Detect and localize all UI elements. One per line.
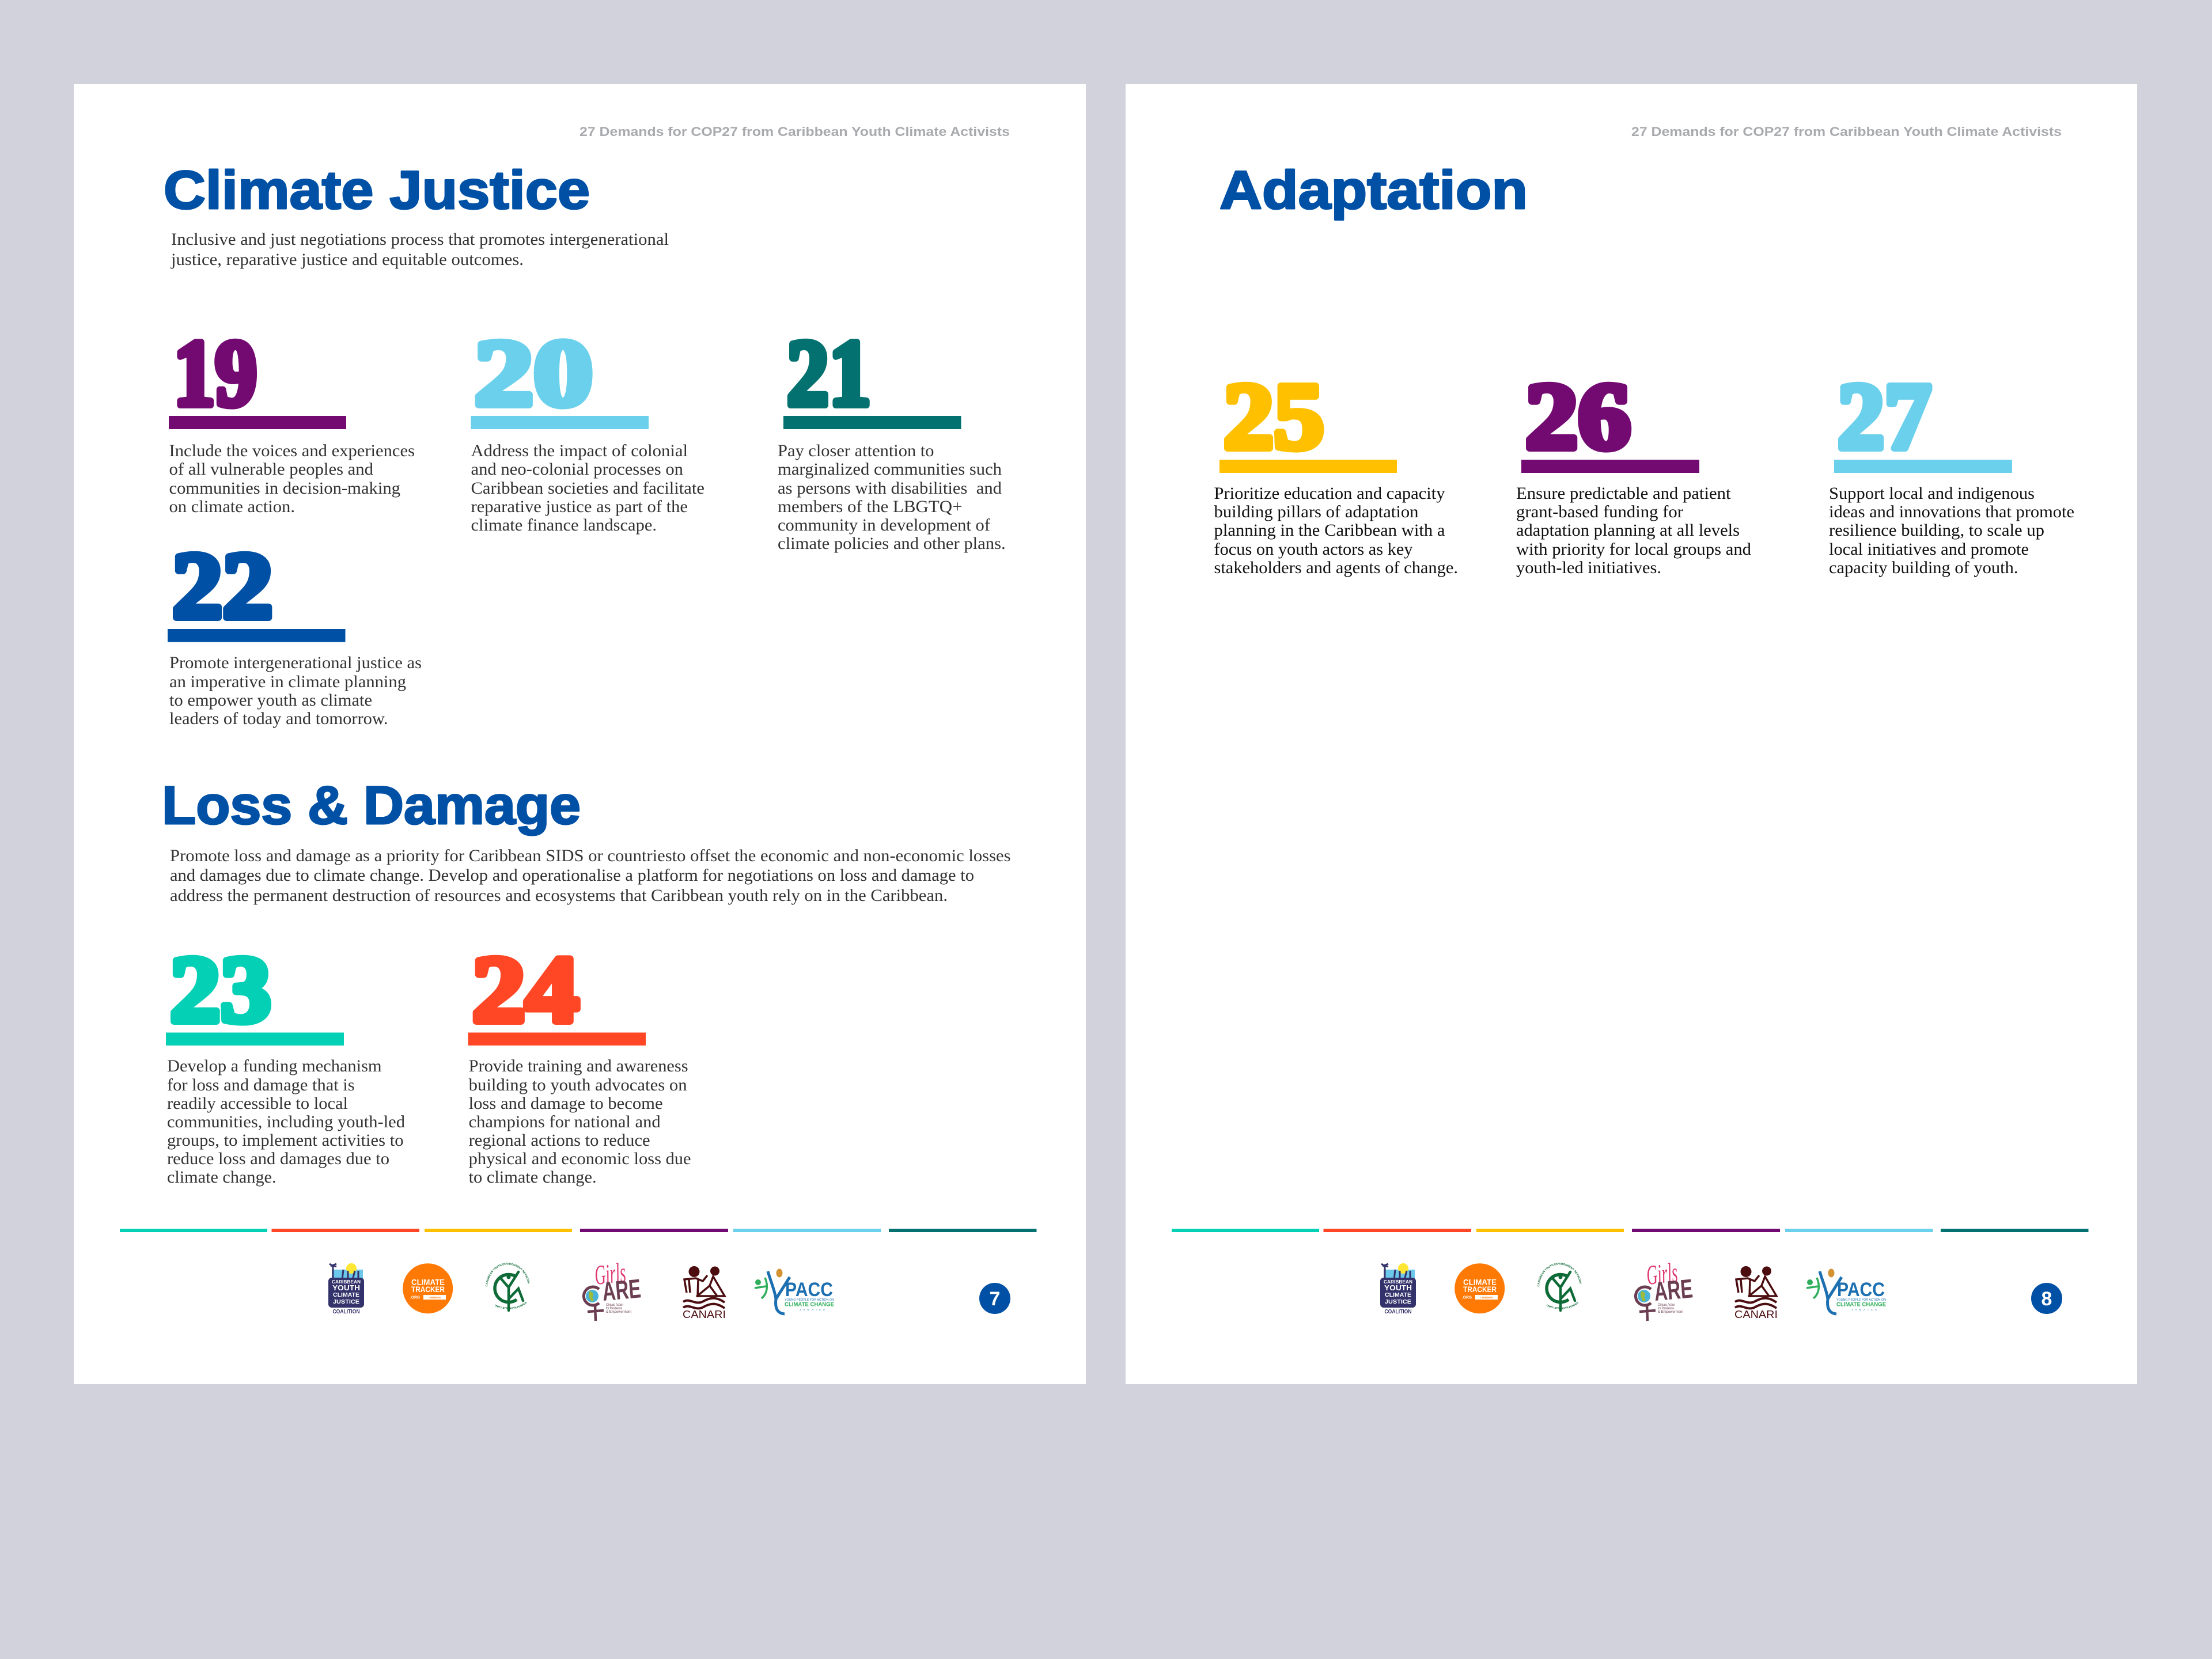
text: demand 19: of all vulnerable peoples and [169, 460, 373, 479]
text: demand 25: Prioritize education and capacity [1214, 484, 1445, 503]
running header: 27 Demands for COP27 from Caribbean Youth Climate Activists [1631, 124, 2062, 139]
logo: YPACC Jamaica: JAMAICA [800, 1308, 825, 1311]
demand 19: 19 [173, 320, 257, 426]
text: loss and damage intro: and damages due to climate change. Develop and operationalise a platform for negotiations on loss and damage to [170, 866, 974, 885]
text: demand 26: Ensure predictable and patient [1516, 484, 1731, 503]
text: demand 21: Pay closer attention to [778, 441, 934, 460]
logo: Climate Tracker: .ORG [410, 1296, 421, 1300]
demand 23: 23 [170, 937, 271, 1042]
demand 25: 25 [1224, 363, 1324, 469]
text: demand 24: regional actions to reduce [469, 1131, 650, 1150]
logo: Girls CARE [1635, 1257, 1694, 1321]
demand 27 [1829, 363, 2074, 577]
demand 24 [468, 937, 691, 1187]
text: demand 23 [167, 1056, 405, 1187]
text: demand 23: groups, to implement activities to [167, 1131, 403, 1150]
text: demand 25: stakeholders and agents of change. [1214, 558, 1458, 577]
text: demand 22: leaders of today and tomorrow. [169, 709, 388, 728]
logo: YPACC Jamaica: PACC [785, 1279, 833, 1301]
logo: Girls CARE: ARE [1653, 1273, 1694, 1306]
logo: Girls CARE: & Empowerment [606, 1310, 631, 1314]
text: climate justice intro: justice, reparative justice and equitable outcomes. [171, 250, 524, 269]
demand 22 [168, 533, 422, 728]
demand 20: 20 [475, 320, 593, 426]
text: loss and damage intro [170, 846, 1010, 905]
text: demand 20: climate finance landscape. [471, 516, 657, 535]
page number 8: 8 [2041, 1288, 2052, 1310]
logo: YPACC Jamaica: CLIMATE CHANGE [1836, 1302, 1886, 1308]
text: demand 21: members of the LBGTQ+ [778, 497, 962, 516]
demand 25 [1214, 363, 1458, 577]
text: demand 23: climate change. [167, 1168, 276, 1187]
logo: Girls CARE: & Empowerment [1658, 1310, 1683, 1314]
text: demand 24: building to youth advocates on [469, 1075, 687, 1094]
logo: CANARI [683, 1266, 726, 1320]
logo: CANARI: CANARI [683, 1309, 726, 1320]
logo: Climate Tracker [1455, 1263, 1505, 1313]
text: demand 24: to climate change. [469, 1168, 597, 1187]
text: demand 27: Support local and indigenous [1829, 484, 2035, 503]
panel: page 7 [74, 84, 1086, 1384]
logo: Climate Tracker: CARIBBEAN [429, 1296, 441, 1299]
logo: YPACC Jamaica [755, 1268, 834, 1314]
text: demand 23: for loss and damage that is [167, 1075, 355, 1094]
logo: Girls CARE: Climate Action [1658, 1304, 1675, 1307]
text: demand 23: reduce loss and damages due to [167, 1149, 389, 1168]
logo: Climate Tracker: CLIMATE [411, 1278, 445, 1287]
demand 20 [471, 320, 704, 535]
logo: Caribbean Youth Climate Justice Coalition: COALITION [1385, 1309, 1411, 1315]
text: loss and damage intro: address the permanent destruction of resources and ecosystems that Caribbean youth rely on in the Caribbean. [170, 886, 948, 905]
logo: Caribbean Youth Climate Justice Coalition: CLIMATE [333, 1291, 359, 1298]
logo: Caribbean Youth Climate Justice Coalition: CARIBBEAN [332, 1279, 361, 1285]
text: demand 22: to empower youth as climate [169, 691, 372, 710]
logo: YPACC Jamaica [1806, 1268, 1886, 1314]
logo: Girls CARE: Climate Action [606, 1304, 623, 1307]
logo: CANARI: CANARI [1734, 1309, 1778, 1320]
logo: Caribbean Youth Climate Justice Coalition: YOUTH [332, 1283, 360, 1292]
text: demand 26: grant-based funding for [1516, 502, 1683, 521]
text: demand 21 [778, 441, 1006, 553]
text: climate justice intro: Inclusive and just negotiations process that promotes intergenerational [171, 230, 669, 249]
text: demand 25 [1214, 484, 1458, 577]
logo: Caribbean Youth Environment Network: CARIBBEAN YOUTH ENVIRONMENT NETWORK [485, 1263, 530, 1287]
logo: Caribbean Youth Climate Justice Coalition: COALITION [333, 1309, 359, 1315]
logo: YPACC Jamaica: JAMAICA [1851, 1308, 1877, 1311]
logo: YPACC Jamaica: PACC [1837, 1279, 1885, 1301]
logo: Caribbean Youth Climate Justice Coalition: YOUTH [1384, 1283, 1412, 1292]
text: demand 26: adaptation planning at all levels [1516, 521, 1740, 540]
text: demand 24: champions for national and [469, 1112, 661, 1131]
footer colour stripes [120, 1229, 1037, 1232]
logo: Climate Tracker: TRACKER [411, 1285, 445, 1294]
logo: YPACC Jamaica: YOUNG PEOPLE FOR ACTION ON [785, 1298, 834, 1302]
logo: YPACC Jamaica: CLIMATE CHANGE [785, 1302, 834, 1308]
logo: Climate Tracker [403, 1263, 453, 1313]
text: demand 19 [169, 441, 415, 516]
text: demand 21: climate policies and other plans. [778, 534, 1006, 553]
text: demand 27: ideas and innovations that promote [1829, 502, 2074, 521]
text: demand 24 [469, 1056, 691, 1187]
text: demand 22: Promote intergenerational justice as [169, 653, 422, 672]
demand 24: 24 [472, 937, 579, 1042]
demand 27: 27 [1838, 363, 1931, 469]
logo: Climate Tracker: CLIMATE [1463, 1278, 1497, 1287]
logo: Caribbean Youth Climate Justice Coalition: JUSTICE [1385, 1298, 1411, 1305]
text: demand 26: with priority for local groups and [1516, 540, 1751, 559]
text: demand 20 [471, 441, 704, 535]
text: demand 20: Caribbean societies and facilitate [471, 479, 704, 498]
logo: Caribbean Youth Environment Network: UNITY STRENGTH PURPOSE [1546, 1302, 1578, 1309]
demand 26 [1516, 363, 1751, 577]
text: demand 23: communities, including youth-led [167, 1112, 405, 1131]
text: demand 19: communities in decision-making [169, 479, 400, 498]
text: demand 27: resilience building, to scale up [1829, 521, 2044, 540]
logo: YPACC Jamaica: YOUNG PEOPLE FOR ACTION ON [1836, 1298, 1886, 1302]
text: demand 26: youth-led initiatives. [1516, 558, 1661, 577]
text: demand 26 [1516, 484, 1751, 577]
logo: Caribbean Youth Environment Network [485, 1263, 530, 1312]
text: demand 23: readily accessible to local [167, 1094, 348, 1113]
text: demand 25: planning in the Caribbean with a [1214, 521, 1445, 540]
demand 21: 21 [787, 320, 871, 426]
page number 7 [979, 1283, 1010, 1314]
logo: Caribbean Youth Climate Justice Coalition: JUSTICE [333, 1298, 359, 1305]
logo: Caribbean Youth Climate Justice Coalition [1380, 1263, 1416, 1315]
text: demand 24: physical and economic loss due [469, 1149, 691, 1168]
text: demand 20: reparative justice as part of the [471, 497, 688, 516]
text: demand 23: Develop a funding mechanism [167, 1056, 382, 1075]
text: demand 19: Include the voices and experiences [169, 441, 415, 460]
demand 19 [169, 320, 415, 516]
heading: Adaptation: Adaptation [1219, 160, 1528, 220]
text: demand 22: an imperative in climate planning [169, 672, 406, 691]
text: demand 22 [169, 653, 422, 728]
text: demand 24: loss and damage to become [469, 1094, 663, 1113]
logo: Climate Tracker: .ORG [1462, 1296, 1472, 1300]
logo: Girls CARE: for Resilience [606, 1307, 623, 1310]
logo: Caribbean Youth Environment Network: UNITY STRENGTH PURPOSE [494, 1302, 527, 1309]
logo: CANARI [1734, 1266, 1778, 1320]
text: demand 20: Address the impact of colonial [471, 441, 688, 460]
text: demand 27: capacity building of youth. [1829, 558, 2018, 577]
logo: Caribbean Youth Climate Justice Coalition: CLIMATE [1385, 1291, 1411, 1298]
logo: Climate Tracker: TRACKER [1463, 1285, 1497, 1294]
page number 8 [2031, 1283, 2062, 1314]
text: demand 25: focus on youth actors as key [1214, 540, 1412, 559]
logo: Caribbean Youth Environment Network: CARIBBEAN YOUTH ENVIRONMENT NETWORK [1537, 1263, 1582, 1287]
page number 7: 7 [990, 1288, 1000, 1310]
text: demand 25: building pillars of adaptation [1214, 502, 1418, 521]
text: demand 27: local initiatives and promote [1829, 540, 2029, 559]
footer colour stripes [1172, 1229, 2089, 1232]
text: demand 27 [1829, 484, 2074, 577]
logo: Caribbean Youth Climate Justice Coalition [328, 1263, 364, 1315]
text: demand 21: community in development of [778, 516, 990, 535]
text: demand 20: and neo-colonial processes on [471, 460, 683, 479]
heading: Climate Justice: Climate Justice [164, 160, 590, 220]
demand 21 [778, 320, 1006, 553]
running header: 27 Demands for COP27 from Caribbean Youth Climate Activists [579, 124, 1010, 139]
logo: Girls CARE: Girls [1645, 1257, 1679, 1291]
text: loss and damage intro: Promote loss and damage as a priority for Caribbean SIDS or countriesto offset the economic and non-economic losses [170, 846, 1010, 865]
logo: Girls CARE: ARE [601, 1273, 642, 1306]
text: demand 24: Provide training and awareness [469, 1056, 688, 1075]
logo: Girls CARE: for Resilience [1658, 1307, 1675, 1310]
logo: Climate Tracker: CARIBBEAN [1480, 1296, 1493, 1299]
text: climate justice intro [171, 230, 669, 269]
logo: Girls CARE: Girls [593, 1257, 627, 1291]
panel: page 8 [1126, 84, 2137, 1384]
logo: Caribbean Youth Climate Justice Coalition: CARIBBEAN [1384, 1279, 1412, 1285]
demand 23 [166, 937, 405, 1187]
text: demand 21: marginalized communities such [778, 460, 1002, 479]
heading: Loss & Damage: Loss & Damage [162, 775, 581, 835]
logo: Girls CARE [584, 1257, 642, 1321]
demand 22: 22 [172, 533, 273, 638]
text: demand 19: on climate action. [169, 497, 295, 516]
demand 26: 26 [1525, 363, 1631, 469]
text: demand 21: as persons with disabilities and [778, 479, 1002, 498]
